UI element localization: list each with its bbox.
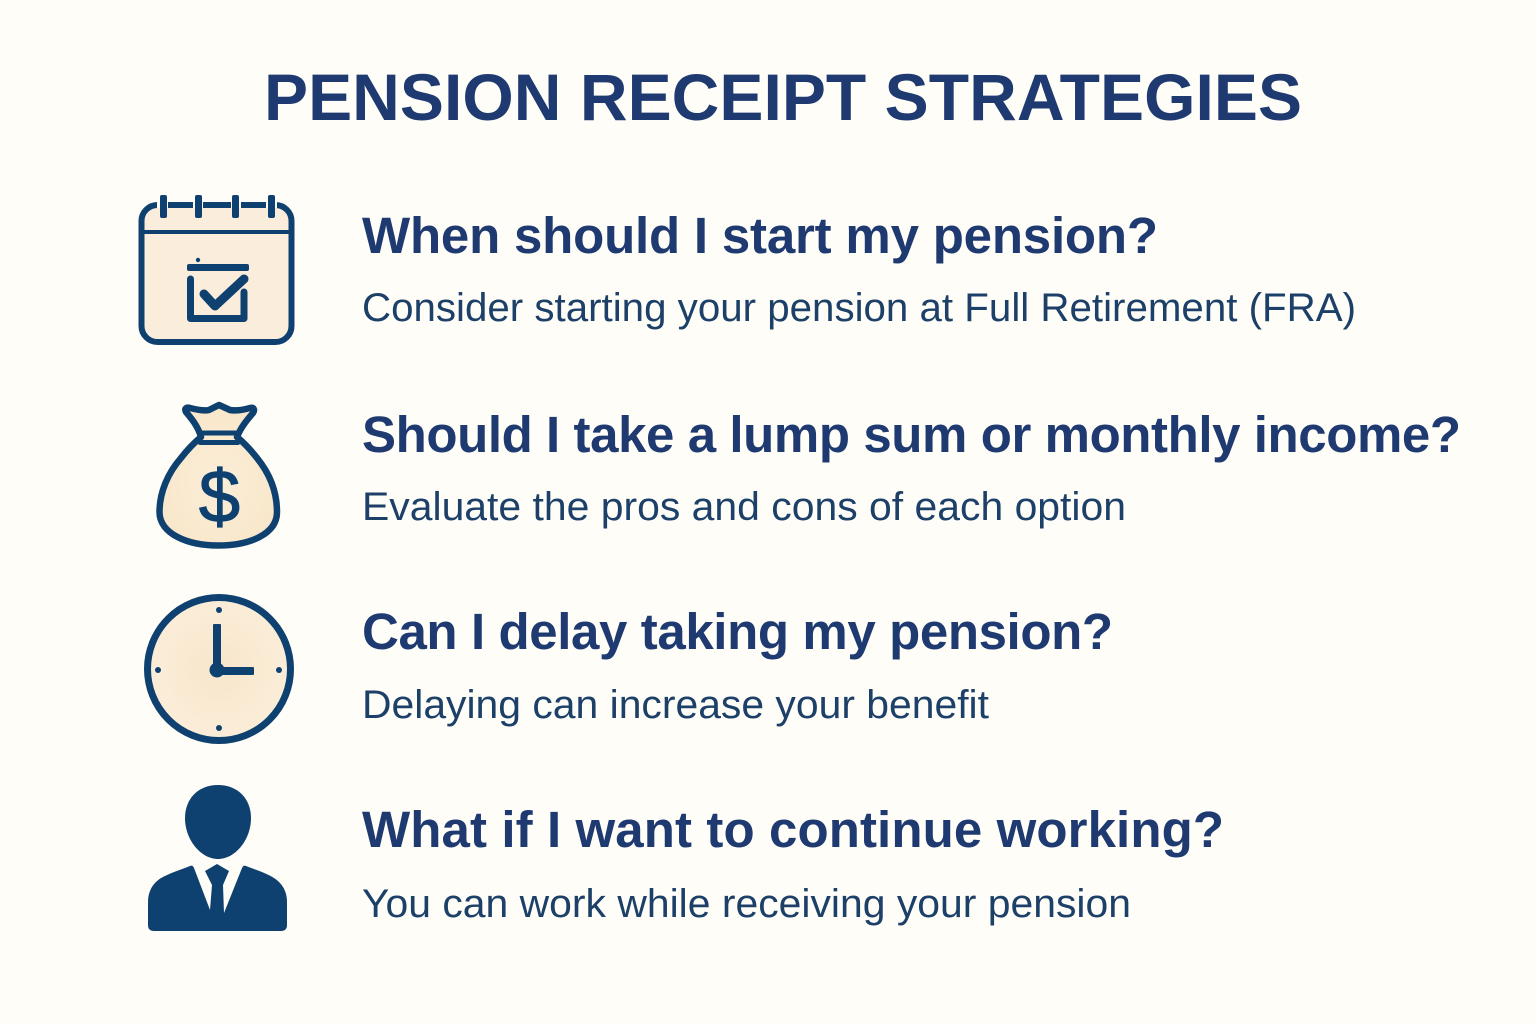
description: continue working: You can work while receiving your pension bbox=[362, 882, 1131, 926]
heading: when to start: When should I start my pension? bbox=[362, 207, 1158, 264]
row: when to start bbox=[139, 195, 1356, 342]
icon: clock bbox=[148, 598, 290, 740]
description: when to start: Consider starting your pension at Full Retirement (FRA) bbox=[362, 286, 1356, 330]
icon: person in suit bbox=[148, 785, 287, 931]
row: lump sum or monthly bbox=[160, 405, 1461, 546]
heading: delay pension: Can I delay taking my pension? bbox=[362, 603, 1113, 660]
description: lump sum or monthly: Evaluate the pros and cons of each option bbox=[362, 485, 1126, 529]
description: delay pension: Delaying can increase your benefit bbox=[362, 683, 989, 727]
heading: lump sum or monthly: Should I take a lump sum or monthly income? bbox=[362, 406, 1461, 463]
row: delay pension bbox=[148, 598, 1113, 740]
title: PENSION RECEIPT STRATEGIES bbox=[264, 60, 1302, 134]
row: continue working bbox=[148, 785, 1224, 931]
icon: money bag bbox=[160, 405, 277, 546]
icon: money bag: $ bbox=[199, 455, 240, 538]
heading: continue working: What if I want to continue working? bbox=[362, 801, 1224, 858]
icon: calendar with checkmark bbox=[139, 195, 294, 342]
